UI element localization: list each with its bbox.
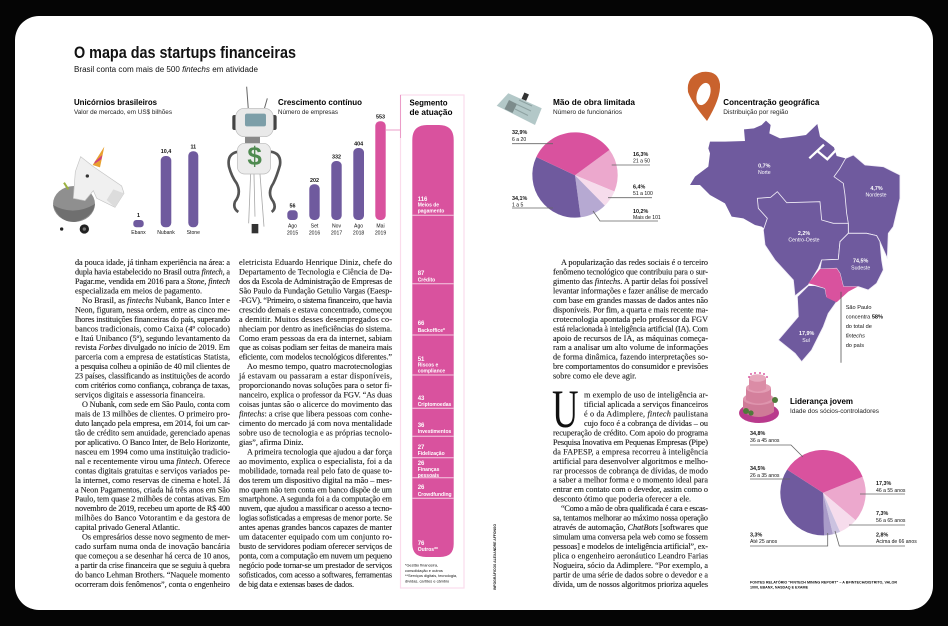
text column 1: contas digitais gratuitas e serviços variados pe- <box>75 466 230 475</box>
text column 1: 23 países, classificando as instituições de acordo <box>75 372 230 381</box>
pie chart: founder age <box>750 431 917 546</box>
text column 3: crotecnologia apontada pelo professor da FGV <box>553 315 708 324</box>
region: Centro-Oeste <box>757 192 848 296</box>
panel: unicorn chart <box>53 97 200 236</box>
text column 3: de forma dinâmica, fazendo interpretações so- <box>553 353 708 362</box>
text column 2: antes apenas grandes bancos capazes de manter <box>239 523 392 532</box>
map labels: 2,2% <box>798 231 810 237</box>
bar chart: number of companies: Ago <box>288 224 297 230</box>
pie chart: employees <box>512 130 661 221</box>
text column 2: um datacenter equipado com um conjunto ro- <box>239 533 392 542</box>
stacked bar: segments: 26 <box>418 485 425 491</box>
text column 1: a Neon Pagamentos, criada há três anos em São <box>75 485 230 494</box>
callout: São Paulo <box>841 292 883 363</box>
text column 1: dupla havia estabelecido no Brasil outra fintech, a <box>75 268 230 276</box>
text column 3, second article: pessoas] e modelos de inteligência artificial”, ex- <box>553 542 708 551</box>
text column 1: O Nubank, com sede em São Paulo, conta com <box>82 400 231 409</box>
text column 2: cimento do mercado já com nova mentalidade <box>239 419 392 428</box>
text column 2 <box>238 258 393 589</box>
pie chart: founder age: 26 a 35 anos <box>750 473 780 479</box>
text column 2: ao movimento, explica o especialista, foi a da <box>239 457 392 466</box>
bar chart: number of companies: Nov <box>332 224 341 230</box>
pie chart: founder age: 7,3% <box>876 511 888 517</box>
pie chart: founder age: 46 a 55 anos <box>876 488 906 494</box>
text column 1: nasceu em 1994 como uma instituição tradicio- <box>75 447 230 456</box>
icon: ID badge <box>497 92 542 125</box>
icon: location pin <box>688 72 720 121</box>
text column 2: Como eram pessoas da era da internet, sabiam <box>239 334 393 343</box>
bar chart: unicorn values: 1 <box>137 213 140 219</box>
pie chart: employees: 1 a 5 <box>512 202 523 208</box>
text column 3, second article: é o da Adimplere, fintech paulistana <box>584 409 708 418</box>
region: Sul <box>778 286 837 362</box>
text column 1: nal e recentemente virou uma fintech. Oferece <box>75 457 230 466</box>
stacked bar: segments: Fidelização <box>418 451 445 457</box>
region: Norte <box>690 121 848 229</box>
text column 1: lhores instituições financeiras do país, superando <box>75 315 230 324</box>
pie chart: founder age: 17,3% <box>876 481 891 487</box>
heading: leadership: Idade dos sócios-controladores <box>790 408 879 415</box>
stacked bar: segments: pessoais <box>418 473 439 479</box>
stacked bar: segments: Outros** <box>418 547 438 553</box>
bar chart: number of companies: 332 <box>332 154 341 160</box>
text column 1: mais de 13 milhões de clientes. O primeiro pro- <box>75 410 230 418</box>
bar chart: unicorn values: Stone <box>187 230 200 236</box>
footnote: segments: **Serviços digitais, tecnologia, <box>405 573 457 578</box>
bar chart: number of companies: Set <box>311 224 319 230</box>
text column 1: cado surfam numa onda de inovação bancária <box>75 542 230 551</box>
callout: São Paulo: do total de <box>846 324 872 330</box>
stacked bar: segments: Backoffice* <box>418 328 445 334</box>
text column 2: São Paulo da Fundação Getulio Vargas (Eaesp- <box>239 286 392 295</box>
text column 2: eletricista Eduardo Henrique Diniz, chefe do <box>239 258 392 267</box>
heading: growth: Número de empresas <box>278 109 338 116</box>
text column 3, second article: rar processos de cobrança de dívidas, de modo <box>553 466 708 475</box>
icon: robot: $ <box>247 141 262 171</box>
pie chart: employees: 6,4% <box>633 184 645 190</box>
bar chart: number of companies: 553 <box>376 114 385 120</box>
text column 3, second article: dívida, um de nossos algoritmos prioriza aqueles <box>553 580 708 589</box>
heading: geography <box>723 97 820 116</box>
heading: labour: Número de funcionários <box>553 109 622 116</box>
text column 1: a partir da crise financeira que se seguiu à quebra <box>75 561 230 570</box>
text column 2: gias”, afirma Diniz. <box>239 438 304 447</box>
stacked bar: segments <box>412 125 454 557</box>
map labels: 17,9% <box>799 331 815 337</box>
text column 2: Departamento de Tecnologia e Ciência de Da- <box>239 268 392 276</box>
subtitle: Brasil conta com mais de 500 fintechs em atividade <box>74 65 259 74</box>
pie chart: founder age: Acima de 66 anos <box>876 539 917 545</box>
pie chart: founder age: 34,8% <box>750 431 765 437</box>
pie chart: employees: 21 a 50 <box>633 158 650 164</box>
stacked bar: segments: 36 <box>418 423 425 429</box>
map: Brazil <box>690 121 900 362</box>
panel: growth chart <box>278 97 386 236</box>
text column 3, second article: sa, tentamos melhorar ao máximo nossa operação <box>553 514 708 523</box>
heading: unicorns <box>74 97 172 116</box>
text column 1: Os empresários desse novo segmento de mer- <box>82 533 230 542</box>
text column 1: que começou a se desenhar há cerca de 10 anos, <box>75 552 230 561</box>
text column 3, second article: simulam uma conversa pela web como se fossem <box>553 532 709 542</box>
callout: São Paulo: do país <box>846 343 864 349</box>
map labels: Sudeste <box>851 266 870 272</box>
text column 3, second article: partir de uma série de dados sobre o devedor e a <box>553 570 708 579</box>
drop cap: U <box>552 379 579 439</box>
bar chart: number of companies: 2019 <box>375 230 386 236</box>
sources: 1000, EBANX, NASDAQ E EXAME <box>750 584 808 590</box>
bar chart: number of companies: Ago <box>354 224 363 230</box>
pie chart: employees: 51 a 100 <box>633 191 653 197</box>
stacked bar: segments: pagamento <box>418 208 444 214</box>
map labels: 0,7% <box>758 164 771 170</box>
text column 3: bre comportamentos do consumidor e previsões <box>553 362 708 371</box>
text column 3: está relacionada à inteligência artificial (IA). Com <box>553 324 709 333</box>
sources: FONTES RELATÓRIO “FINTECH MINING REPORT” – A BFINTECH/DISTRITO, VALOR <box>750 580 897 584</box>
stacked bar: segments: Investimentos <box>418 429 452 435</box>
text column 2: nheciam por dentro as ineficiências do sistema. <box>239 324 392 333</box>
icon: cake <box>739 372 779 423</box>
bar chart: unicorn values: Ebanx <box>131 230 146 236</box>
text column 1: milhões do Banco Votorantim e da gestora de <box>75 514 230 523</box>
text column 2: Ao mesmo tempo, quatro macrotecnologias <box>247 362 392 371</box>
callout: São Paulo: fintechs <box>846 333 865 339</box>
text column 1: e Itaú Unibanco (5º), segundo levantamento da <box>75 334 230 343</box>
text column 2: mobilidade, tornada real pelo fato de quase to- <box>239 466 392 475</box>
text column 2: sobre uso de tecnologia e as próprias tecnolo- <box>239 428 392 438</box>
text column 3, second article: m exemplo de uso de inteligência ar- <box>584 390 708 400</box>
text column 2: fintechs: a crise que libera pessoas com conhe- <box>239 410 392 418</box>
stacked bar: segments: 51 <box>418 357 425 363</box>
text column 1: Pagar.me, vendida em 2016 para a Stone, fintech <box>75 277 230 286</box>
map labels <box>758 164 887 344</box>
region: Sudeste <box>820 233 883 290</box>
text column 2: que as coisas podiam ser feitas de maneira mais <box>239 343 392 352</box>
text column 2: sofisticados, com acesso a softwares, ferramentas <box>239 570 392 580</box>
region: São Paulo <box>808 268 858 302</box>
text column 1: da pouca idade, já tinham experiência na área: a <box>75 258 230 267</box>
text column 2: coisas juntas são o alicerce do movimento das <box>239 400 392 409</box>
map labels: 74,5% <box>853 258 869 264</box>
text column 1: do banco Lehman Brothers. “Naquele momento <box>75 570 230 580</box>
bar chart: number of companies: 2015 <box>287 230 298 236</box>
text column 1: la internet, como reservas de cinema e hotel. Já <box>75 476 230 485</box>
footnote: segments: dívidas, cartões e câmbio <box>405 578 449 584</box>
bar chart: number of companies: 2016 <box>309 230 320 236</box>
text column 3, second article: tificial aplicada a serviços financeiros <box>584 400 708 409</box>
pie chart: founder age: 36 a 45 anos <box>750 438 780 444</box>
text column 1: No Brasil, as fintechs Nubank, Banco Inter e <box>82 296 230 305</box>
bar chart: number of companies: 2017 <box>331 230 342 236</box>
pie chart: founder age: 34,5% <box>750 466 765 472</box>
text column 2: a demitir. Muitos desses desempregados co- <box>239 315 392 324</box>
stacked bar: segments: Finanças <box>418 467 440 473</box>
text column 1: duto lançado pela empresa, em 2014, foi um car- <box>75 419 230 428</box>
bar chart: number of companies: 2018 <box>353 230 364 236</box>
pie chart: employees: 6 a 20 <box>512 137 526 143</box>
stacked bar: segments: 66 <box>418 321 425 327</box>
panel: segments <box>386 95 464 588</box>
text column 2: logias sofisticadas a empresas de menor porte. Se <box>239 514 392 523</box>
text column 2: ponta, com a computação em nuvem um pequeno <box>239 552 392 561</box>
text column 3: levantar informações e fazer análise de mercado <box>553 286 708 295</box>
text column 3: gimento das fintechs. A partir delas foi possível <box>553 277 709 286</box>
bar chart: number of companies: 56 <box>290 204 296 210</box>
text column 3, second article: através de automação, ChatBots [softwares que <box>553 523 708 532</box>
heading: growth: Crescimento contínuo <box>278 97 362 107</box>
footnote: segments: consolidação e outros <box>405 568 443 573</box>
stacked bar: segments: Riscos e <box>418 362 438 368</box>
heading: unicorns: Valor de mercado, em US$ bilhões <box>74 109 172 116</box>
text column 3 <box>553 258 709 381</box>
text column 3, second article: artificial para desenvolver algoritmos e melho- <box>553 457 708 466</box>
stacked bar: segments: 26 <box>418 461 425 467</box>
text column 3, second article <box>553 390 709 589</box>
stacked bar: segments: 76 <box>418 541 425 547</box>
text column 2: A primeira tecnologia que ajudou a dar força <box>247 447 392 456</box>
bar chart: unicorn values: 10,4 <box>161 149 171 155</box>
text column 3, second article: recuperação de crédito. Com apoio do programa <box>553 428 708 437</box>
text column 1: revista Forbes divulgado no início de 2019. Em <box>75 343 231 352</box>
text column 3, second article: entrar em contato com o devedor, assim como o <box>553 485 708 494</box>
text column 2: -FGV). “Primeiro, o sistema financeiro, que havia <box>239 296 392 305</box>
heading: labour: Mão de obra limitada <box>553 97 635 107</box>
text column 1: com critérios como confiança, cobrança de taxas, <box>75 381 230 390</box>
text column 2: mo quem não tem conta em banco dispõe de um <box>239 485 393 494</box>
sources <box>750 580 897 590</box>
text column 1: tão de crédito sem anuidade, gerenciado apenas <box>75 428 230 438</box>
text column 2: dos terem um dispositivo digital na mão – mes- <box>239 476 392 485</box>
heading: leadership <box>790 396 879 415</box>
heading: segments <box>410 98 452 117</box>
icon: robot <box>229 87 280 233</box>
bar chart: number of companies: 404 <box>354 142 363 148</box>
heading: segments: de atuação <box>410 107 452 117</box>
text column 3: com base em grandes massas de dados antes não <box>553 296 708 305</box>
text column 3, second article: Nogueira, sócio da Adimplere. “Por exemplo, a <box>553 561 708 570</box>
stacked bar: segments: compliance <box>418 368 445 374</box>
text column 3, second article: “Como a mão de obra qualificada é cara e escas- <box>561 504 708 513</box>
text column 3, second article: plica o engenheiro aeronáutico Leandro Farias <box>553 552 708 560</box>
map labels: Centro-Oeste <box>788 238 820 244</box>
map labels: 4,7% <box>870 186 883 192</box>
text column 3: fenômeno tecnológico que contribuiu para o sur- <box>553 268 708 276</box>
text column 2: negócio pode tornar-se um prestador de serviços <box>239 561 392 570</box>
text column 2: de big data e extensas bases de dados. <box>239 580 354 589</box>
pie chart: founder age: Até 25 anos <box>750 539 778 545</box>
text column 1: novembro de 2019, recebeu um aporte de R$ 400 <box>75 504 230 513</box>
text column 2: dos da Escola de Administração de Empresas de <box>239 277 392 286</box>
bar chart: unicorn values: Nubank <box>157 230 175 236</box>
text column 2: já estavam ou passaram a estar disponíveis, <box>238 372 392 381</box>
text column 2: nuvem, que ajudou a massificar o acesso a tecno- <box>239 504 392 513</box>
text column 1: serviços digitais e assessoria financeira. <box>75 391 205 400</box>
text column 1 <box>75 258 231 589</box>
text column 2: busto de servidores podiam oferecer serviços de <box>239 542 392 551</box>
text column 3, second article: a saber a melhor forma e o momento ideal para <box>553 476 708 485</box>
text column 3, second article: Pesquisa Inovativa em Pequenas Empresas (Pipe) <box>553 438 708 447</box>
text column 3: sobre como ele deve agir. <box>553 372 636 381</box>
heading: leadership: Liderança jovem <box>790 396 853 406</box>
heading: geography: Concentração geográfica <box>723 97 820 107</box>
icon: unicorn <box>53 147 124 234</box>
pie chart: employees: 10,2% <box>633 209 648 215</box>
text column 2: nanceiro, explica o professor da FGV. “As duas <box>239 391 392 400</box>
pie chart: founder age: 2,8% <box>876 532 888 538</box>
pie chart: employees: Mais de 101 <box>633 215 661 221</box>
text column 2: eficiente, com modelos tecnológicos diferentes.” <box>239 353 392 362</box>
bar chart: number of companies <box>287 114 386 236</box>
pie chart: employees: 32,9% <box>512 130 527 136</box>
stacked bar: segments: Crédito <box>418 278 435 284</box>
text column 1: Paulo, tem quase 2 milhões de contas ativas. Em <box>75 495 231 504</box>
pie chart: founder age: 56 a 65 anos <box>876 518 906 524</box>
map labels: Sul <box>802 338 810 344</box>
callout: São Paulo: concentra 58% <box>846 314 883 320</box>
bar chart: number of companies: Mai <box>376 224 385 230</box>
text column 1: ocorreram dois fenômenos”, conta o engenheiro <box>75 580 230 589</box>
map labels: Nordeste <box>865 192 887 198</box>
text column 2: crescido demais e estava concentrado, começou <box>239 305 392 314</box>
pie chart: founder age: 3,3% <box>750 532 762 538</box>
heading: growth <box>278 97 362 116</box>
footnote: segments: *Gestão financeira, <box>405 562 438 568</box>
text column 1: a pesquisa colheu a opinião de 40 mil clientes de <box>75 362 230 371</box>
text column 3, second article: cujo foco é a cobrança de dívidas – ou <box>584 419 708 428</box>
pie chart: employees: 34,1% <box>512 196 527 202</box>
callout: São Paulo: São Paulo <box>846 305 872 311</box>
text column 1: especializada em meios de pagamento. <box>75 286 202 295</box>
stacked bar: segments: Crowdfunding <box>418 492 452 498</box>
text column 3: ram a analisar um alto volume de informações <box>553 343 708 352</box>
stacked bar: segments: 27 <box>418 445 425 451</box>
text column 2: proporcionando novas soluções para o setor fi- <box>239 381 392 390</box>
text column 1: Neon, figuram, nessa ordem, entre as cinco me- <box>75 305 230 314</box>
text column 3: disponíveis. Por fim, a quarta e mais recente ma- <box>553 305 708 314</box>
stacked bar: segments: 116 <box>418 197 428 203</box>
heading: segments: Segmento <box>410 98 448 108</box>
heading: geography: Distribuição por região <box>723 109 789 116</box>
text column 2: smartphone. A segunda foi a da computação em <box>239 495 393 504</box>
credit: INFOGRÁFICOS ALEXANDRE AFFONSO <box>492 524 497 590</box>
bar chart: number of companies: 202 <box>310 178 319 184</box>
text column 1: parceria com a empresa de estatísticas Statista, <box>75 353 230 362</box>
footnote: segments <box>405 562 457 584</box>
text column 1: bancos tradicionais, como Caixa (4º colocado) <box>75 324 230 333</box>
bar chart: unicorn values <box>131 144 200 236</box>
heading: labour <box>553 97 635 116</box>
bar chart: unicorn values: 11 <box>190 144 196 150</box>
region: Nordeste <box>834 155 900 258</box>
text column 1: por aplicativo. O Banco Inter, de Belo Horizonte, <box>75 438 230 447</box>
text column 3, second article: da FAPESP, a empresa recorreu à inteligência <box>553 447 708 456</box>
text column 1: capital privado General Atlantic. <box>75 523 180 532</box>
title: O mapa das startups financeiras <box>74 44 296 62</box>
river channel <box>809 145 837 159</box>
heading: unicorns: Unicórnios brasileiros <box>74 97 157 107</box>
stacked bar: segments: 87 <box>418 271 425 277</box>
stacked bar: segments: Criptomoedas <box>418 402 452 408</box>
text column 3: apoio de recursos de IA, as máquinas começa- <box>553 334 708 343</box>
stacked bar: segments: 43 <box>418 396 425 402</box>
pie chart: employees: 16,3% <box>633 152 648 158</box>
map labels: Norte <box>758 170 771 176</box>
stacked bar: segments: Meios de <box>418 202 439 208</box>
text column 3, second article: desconto ótimo que poderia oferecer a ele. <box>553 495 691 504</box>
text column 3: A popularização das redes sociais é o terceiro <box>561 258 708 267</box>
